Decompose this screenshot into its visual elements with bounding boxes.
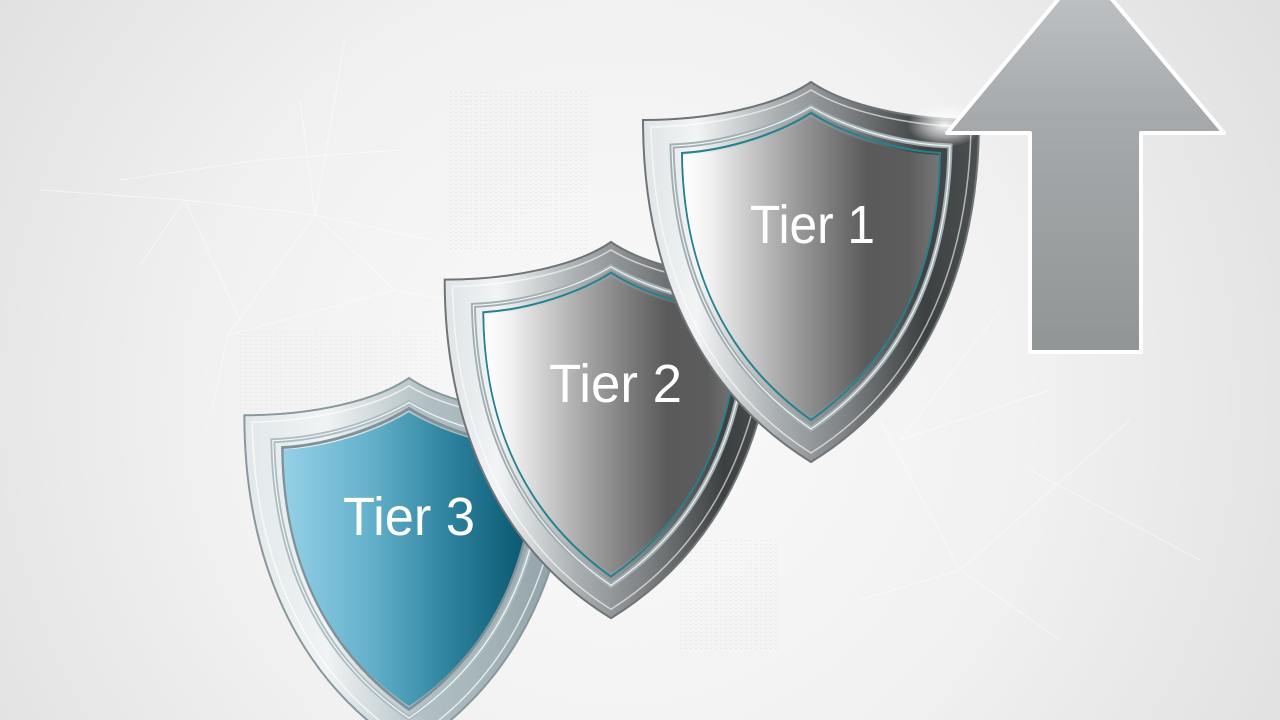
- arrow pointing up: [947, 0, 1224, 352]
- label: Tier 1: Tier 1: [750, 195, 875, 255]
- shield: Tier 2: [445, 242, 777, 618]
- shield: Tier 3: [244, 378, 574, 720]
- shield: Tier 1: [643, 82, 983, 462]
- label: Tier 3: Tier 3: [343, 487, 475, 547]
- label: Tier 2: Tier 2: [549, 354, 682, 414]
- background network texture: [40, 40, 1200, 650]
